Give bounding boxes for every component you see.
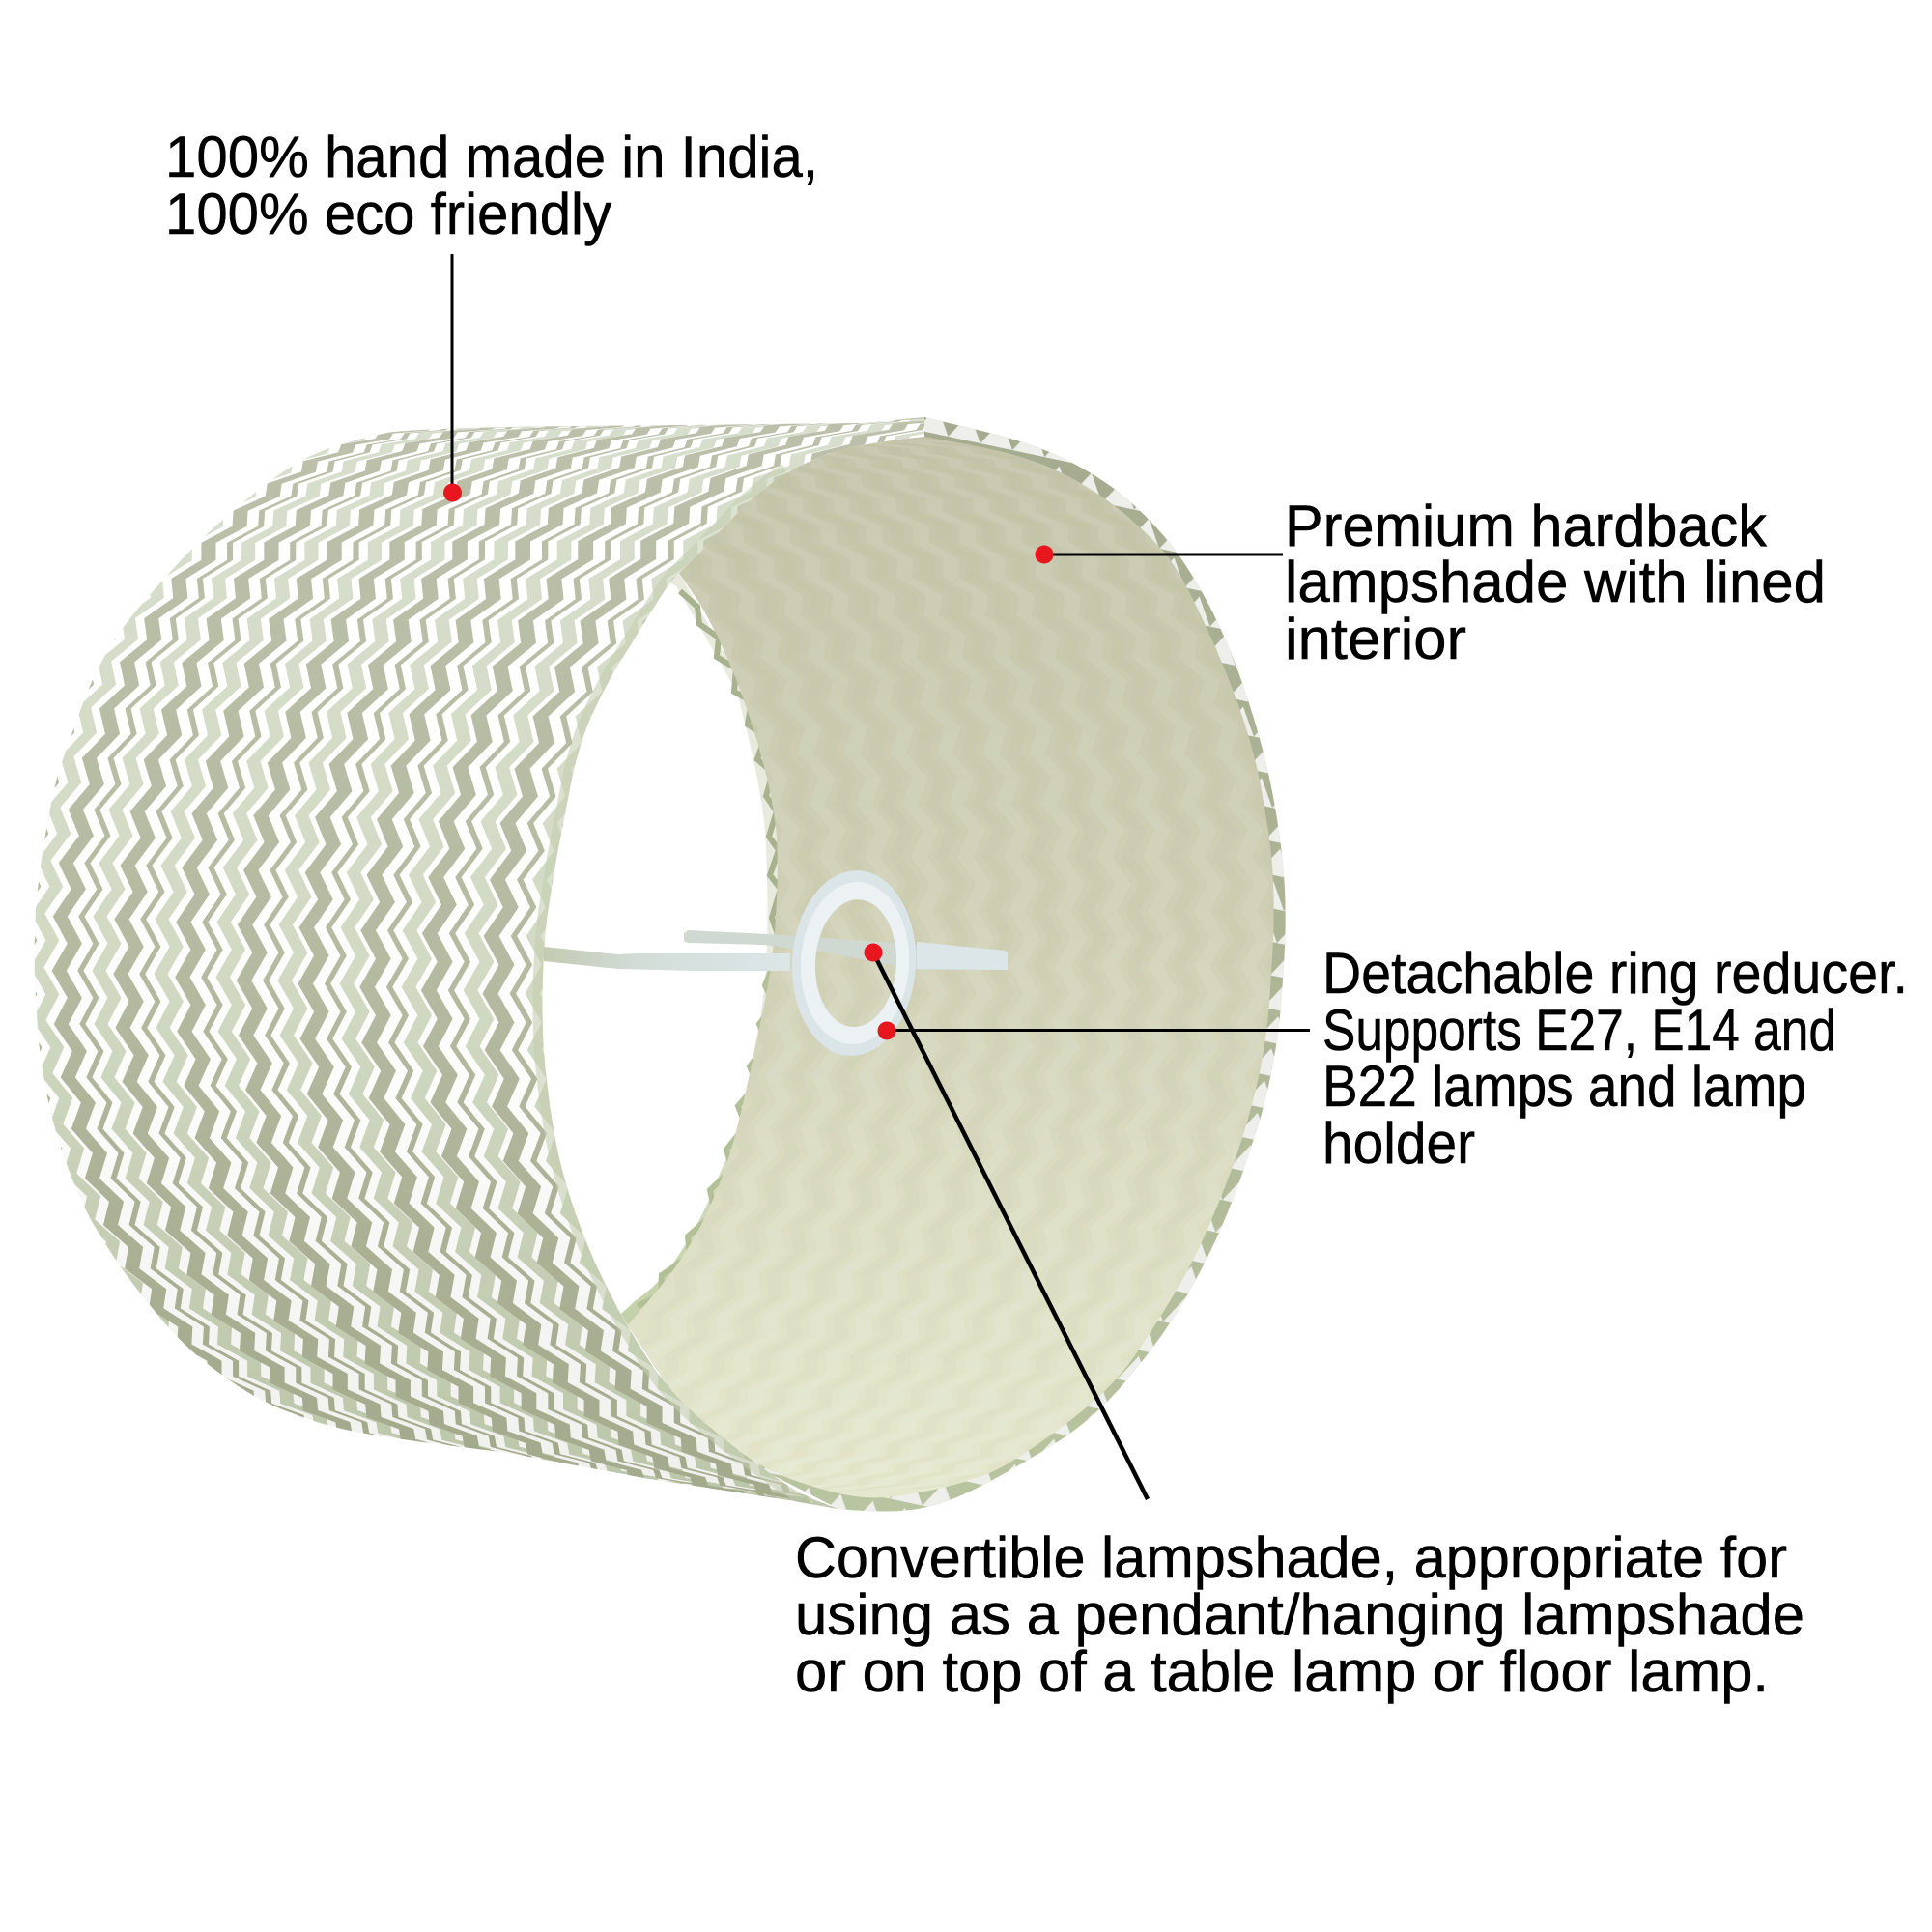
front spider fitter bar, left arm [544, 947, 790, 971]
callout text: hardback lining: interior [1285, 607, 1466, 671]
chevron patterned outer shell [35, 417, 924, 1509]
lampshade illustration [0, 416, 1311, 1520]
callout text: hand made: 100% hand made in India, [165, 125, 818, 189]
callout text: hardback lining: lampshade with lined [1285, 550, 1826, 614]
far spider fitter bar [684, 930, 1008, 970]
callout text: convertible: Convertible lampshade, appropriate for [795, 1525, 1787, 1590]
callout text: ring reducer: B22 lamps and lamp [1322, 1054, 1806, 1119]
callout: hardback lining [1036, 494, 1826, 671]
leader line: hardback lining [1044, 553, 1283, 556]
ring reducer [787, 867, 921, 1059]
red dot: ring reducer [877, 1022, 896, 1039]
callout text: ring reducer: holder [1322, 1111, 1475, 1176]
callout: hand made [165, 125, 818, 502]
callout text: hand made: 100% eco friendly [165, 182, 611, 246]
red dot: hardback lining [1036, 545, 1053, 564]
callout text: convertible: or on top of a table lamp or floor lamp. [795, 1639, 1769, 1704]
leader line: convertible [873, 952, 1148, 1499]
lined interior of lampshade [628, 437, 1274, 1497]
front spider fitter bar, right arm [917, 942, 1008, 970]
leader line: ring reducer [887, 1029, 1310, 1032]
outer rim of lampshade opening [628, 417, 1286, 1511]
red dot: hand made [443, 483, 462, 502]
callout text: hardback lining: Premium hardback [1285, 494, 1768, 558]
far rim band beside the opening [621, 573, 792, 1325]
callout: convertible [795, 943, 1804, 1704]
callout: ring reducer [877, 941, 1908, 1176]
leader line: hand made [450, 254, 454, 493]
callout text: convertible: using as a pendant/hanging lampshade [795, 1582, 1804, 1647]
callout text: ring reducer: Supports E27, E14 and [1322, 998, 1836, 1063]
red dot: convertible [864, 943, 883, 962]
